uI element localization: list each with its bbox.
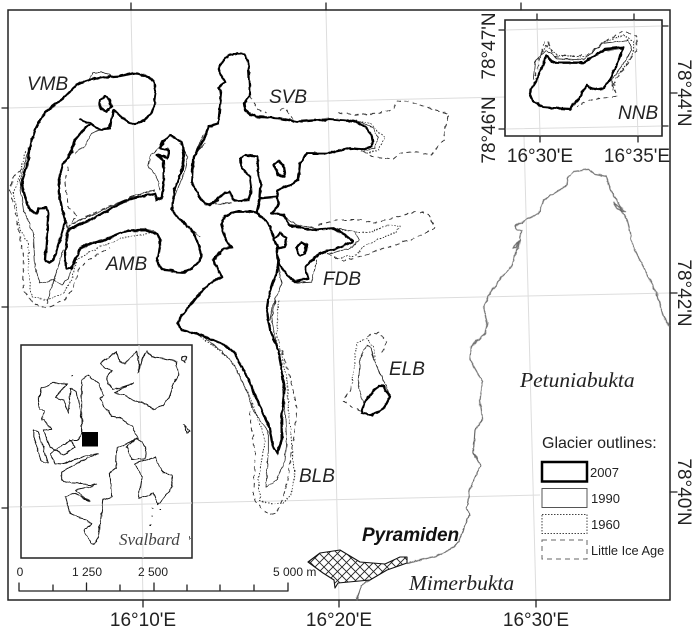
longitude labels [110,146,670,628]
2007 right edge BLB upper [268,262,278,300]
scale bar: 1 250 [72,565,102,579]
2007 outline ELB [362,386,390,415]
2007 nunatak VMB [100,96,112,112]
label NNB: NNB [618,103,658,124]
study area square [82,432,98,446]
1960 outline ELB [352,338,377,387]
scale bar: 5 000 m [273,565,316,579]
2007 outline VMB [22,73,156,263]
latitude labels: 78°47'N [479,12,500,80]
place labels: Pyramiden [362,525,459,546]
glaciers VMB and AMB [10,72,202,308]
2007 outline FDB [257,197,353,282]
2007 outline SVB [192,53,373,205]
latitude labels [479,12,694,526]
1990 outline VMB AMB [20,72,200,303]
glacier labels: BLB [299,466,335,487]
Little Ice Age outline VMB AMB [10,167,155,308]
place labels [362,368,635,595]
Little Ice Age outline NNB [535,32,637,107]
2007 outline AMB [65,136,202,273]
1960 outline VMB AMB [13,152,157,300]
2007 outline BLB lower [177,300,285,454]
1990 outline ELB [358,345,390,403]
2007 nunataks [274,161,307,256]
legend: glacier outlines: 1960 [591,517,620,532]
Little Ice Age outline ELB [343,333,387,412]
glacier labels: FDB [323,269,361,290]
place labels: Mimerbukta [408,571,514,595]
scale bar [17,565,316,591]
legend: glacier outlines: 1990 [591,491,620,506]
label Svalbard: Svalbard [119,530,180,549]
longitude labels: 16°30'E [507,146,573,167]
latitude labels: 78°42'N [673,259,694,327]
2007 outline BLB upper [180,212,257,318]
2007 outline NNB [530,48,623,109]
latitude labels: 78°46'N [479,96,500,164]
legend: glacier outlines: Little Ice Age [591,543,664,558]
1960 outline BLB [200,300,294,504]
glacier labels: VMB [27,74,68,95]
place labels: Petuniabukta [519,368,635,392]
longitude labels: 16°35'E [604,146,670,167]
glacier labels [27,74,425,487]
latitude labels: 78°44'N [673,59,694,127]
legend: glacier outlines: 2007 [590,465,619,480]
glacier labels: SVB [269,87,307,108]
glacier labels: ELB [389,359,425,380]
Little Ice Age outline BLB [250,350,297,515]
scale bar: 0 [17,565,24,579]
legend: glacier outlines: Glacier outlines: [542,435,657,452]
glacier labels: AMB [105,254,148,275]
Svalbard coastline [33,350,190,545]
inset: NNB glacier [499,14,668,142]
Little Ice Age outline SVB FDB [250,95,448,261]
coastline [357,169,669,600]
legend: glacier outlines [542,435,664,559]
Pyramiden settlement hatched area [308,550,407,588]
1990 outline BLB [203,300,287,487]
1990 outline SVB FDB [194,120,378,320]
glacier BLB lower [177,300,297,515]
scale bar: 2 500 [138,565,168,579]
latitude labels: 78°40'N [673,458,694,526]
glacier ELB [343,333,390,415]
1990 outline NNB [533,40,632,90]
glaciers SVB, FDB and upper BLB [180,53,448,320]
inset: Svalbard locator map [21,345,192,558]
1960 outline SVB FDB [327,120,400,258]
1960 outline NNB [538,35,634,80]
